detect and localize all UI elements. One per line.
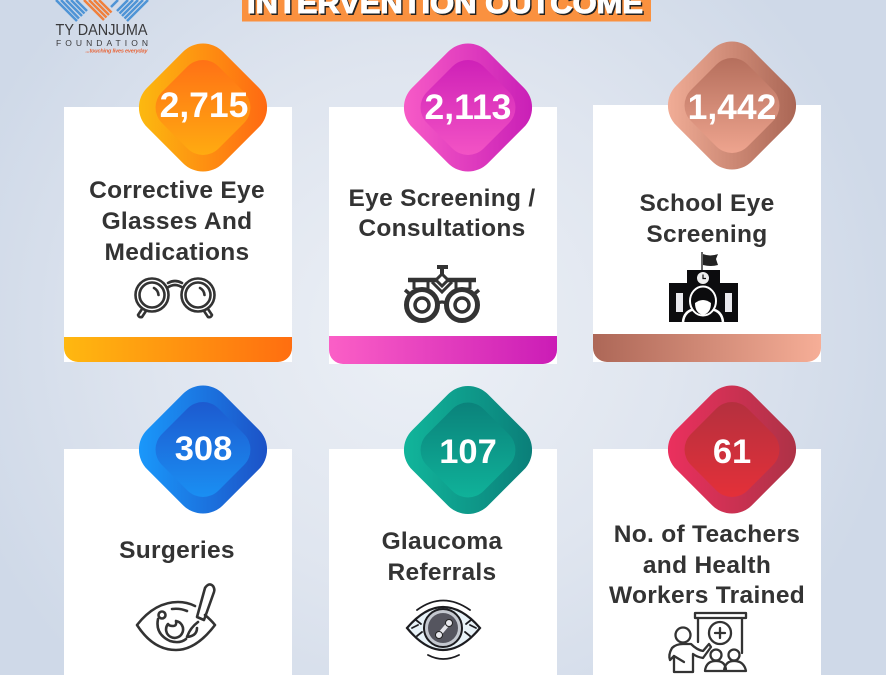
label: Glaucoma bbox=[382, 528, 503, 555]
logo subtitle: FOUNDATION bbox=[56, 38, 148, 48]
logo name: TY DANJUMA bbox=[56, 22, 148, 39]
colour bar bbox=[64, 337, 292, 362]
icon: trainer at board bbox=[669, 613, 746, 672]
label: Corrective Eye bbox=[89, 177, 265, 204]
number badge: 2,113 bbox=[425, 87, 511, 127]
label: Consultations bbox=[358, 215, 526, 242]
panel: corrective eye glasses bbox=[64, 32, 292, 362]
number badge bbox=[392, 374, 544, 526]
colour bar bbox=[329, 336, 557, 364]
number badge bbox=[656, 374, 808, 525]
panel: school eye screening bbox=[593, 30, 821, 362]
logo mark: chevron stripes bbox=[56, 0, 148, 21]
number badge bbox=[127, 374, 279, 525]
icon: eye surgery bbox=[137, 584, 215, 650]
colour bar bbox=[593, 334, 821, 362]
number badge: 1,442 bbox=[688, 87, 776, 127]
number badge bbox=[127, 32, 279, 183]
panel: eye screening bbox=[329, 32, 557, 364]
number badge: 107 bbox=[439, 433, 497, 471]
number badge: 2,715 bbox=[160, 85, 248, 125]
icon: school with student bbox=[669, 252, 738, 322]
logo: TY Danjuma Foundation bbox=[56, 0, 148, 54]
label: Screening bbox=[646, 221, 768, 248]
icon: glaucoma eye bbox=[407, 600, 480, 659]
panel: teachers and health workers trained bbox=[593, 374, 821, 675]
label: Medications bbox=[105, 239, 249, 266]
number badge bbox=[392, 32, 544, 183]
number badge: 308 bbox=[175, 430, 232, 468]
label: Workers Trained bbox=[609, 582, 805, 609]
panel: glaucoma referrals bbox=[329, 374, 557, 675]
number badge bbox=[656, 30, 808, 181]
label: and Health bbox=[643, 552, 771, 579]
label: Surgeries bbox=[119, 537, 235, 564]
label: Glasses And bbox=[102, 208, 252, 235]
icon: trial frame bbox=[405, 267, 479, 320]
panel: surgeries bbox=[64, 374, 292, 675]
label: Eye Screening / bbox=[349, 185, 535, 212]
label: Referrals bbox=[388, 559, 496, 586]
icon: glasses bbox=[136, 278, 214, 317]
label: No. of Teachers bbox=[614, 521, 800, 548]
number badge: 61 bbox=[713, 433, 751, 471]
logo tagline: ...touching lives everyday bbox=[86, 48, 148, 54]
label: School Eye bbox=[639, 190, 775, 217]
